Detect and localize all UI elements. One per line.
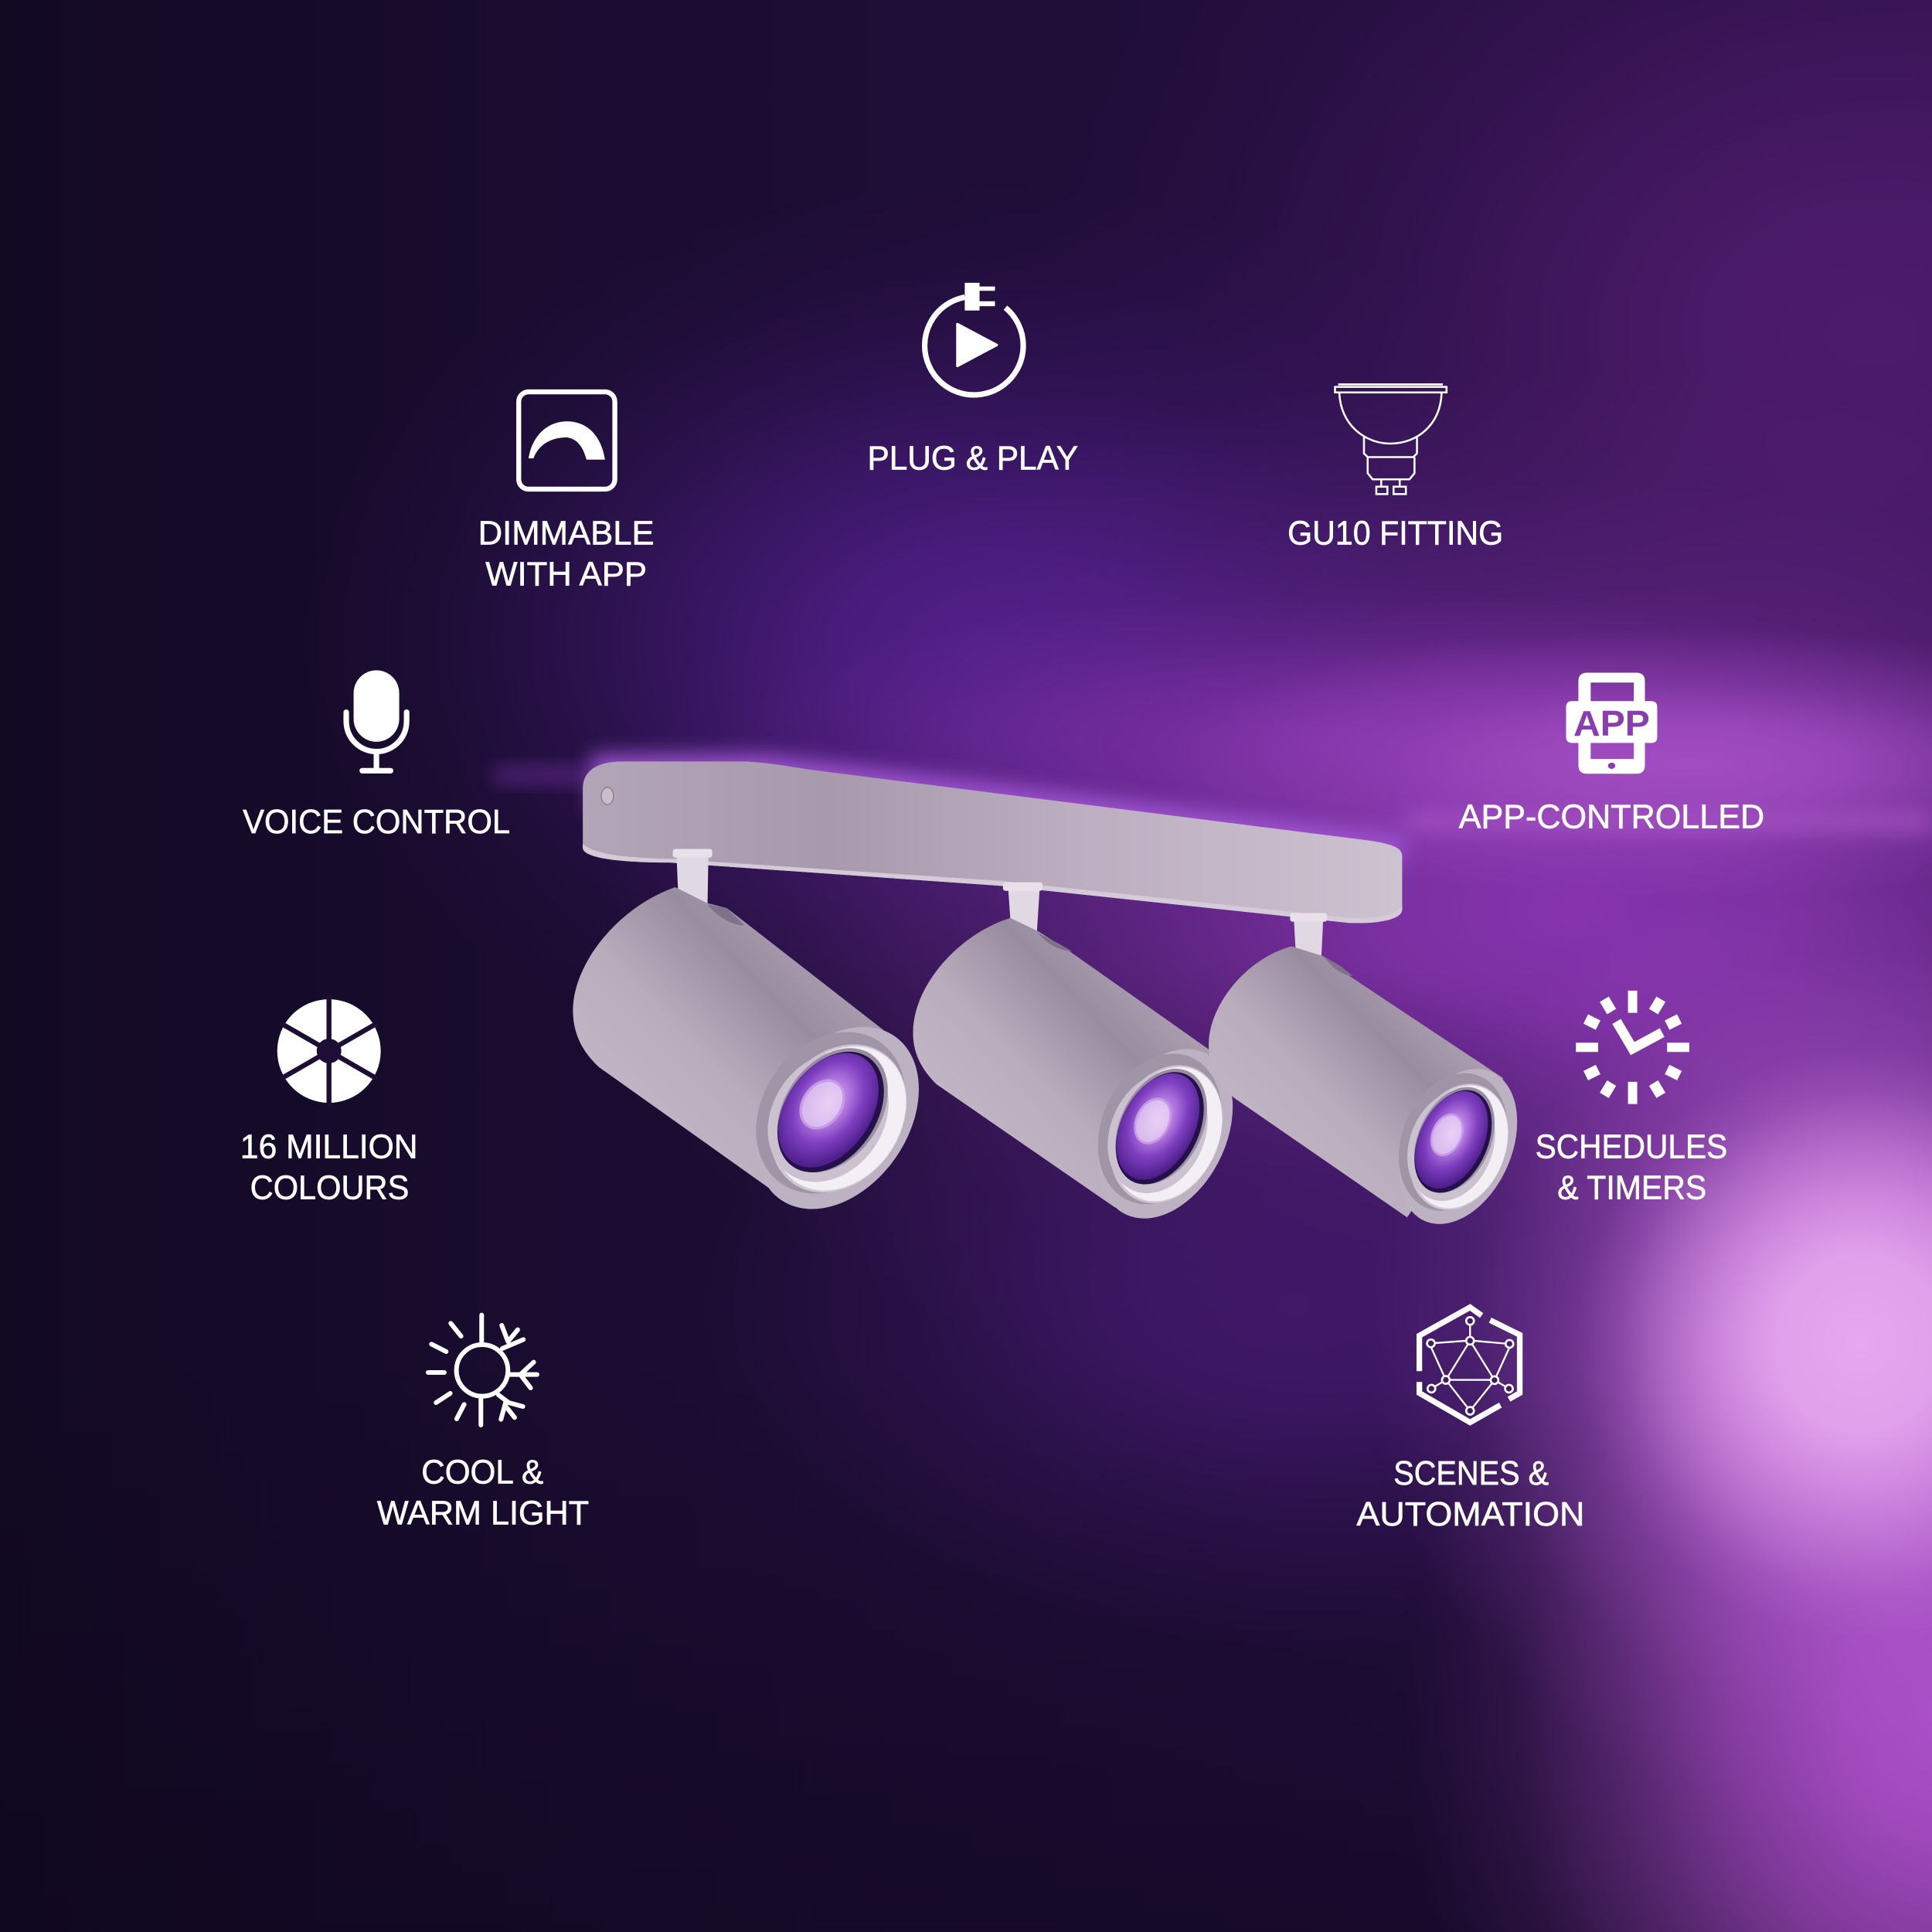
spotlight 3 [1209,913,1542,1250]
feature: app controlled [1459,673,1764,835]
feature: plug and play [867,283,1078,477]
feature: dimmable with app: WITH APP [485,555,647,593]
feature: schedules and timers [1536,991,1727,1206]
icon: hexagon network [1420,1308,1520,1423]
feature: scenes and automation [1356,1308,1584,1533]
label: DIMMABLE [478,515,655,553]
icon: plug timer [925,283,1023,395]
label: APP-CONTROLLED [1459,798,1764,835]
label: COOL & [421,1454,543,1492]
feature: schedules and timers: & TIMERS [1557,1168,1706,1206]
feature: cool and warm light: WARM LIGHT [377,1494,589,1532]
icon: microphone [346,670,406,770]
spotlight 2 [913,883,1260,1247]
label: VOICE CONTROL [243,803,510,841]
feature: 16 million colours [240,995,417,1206]
ceiling bar [583,761,1402,923]
label: SCHEDULES [1536,1128,1727,1166]
label: SCENES & [1393,1454,1549,1492]
icon: tablet with APP badge [1566,673,1657,774]
label: 16 MILLION [240,1128,417,1166]
feature: scenes and automation: AUTOMATION [1356,1495,1584,1533]
label: PLUG & PLAY [867,439,1078,477]
product: triple spotlight fixture [573,761,1542,1250]
icon: clock [1576,991,1689,1104]
icon: tablet with APP badge: APP [1573,703,1650,743]
icon: sun and snowflake [428,1315,537,1425]
icon: colour wheel [277,995,381,1107]
icon: GU10 bulb [1335,384,1447,494]
icon: dimmer [519,392,615,489]
spotlight 1 [573,849,952,1240]
feature: cool and warm light [377,1315,589,1532]
feature: dimmable with app [478,392,655,593]
label: GU10 FITTING [1287,515,1503,553]
feature: GU10 fitting [1287,384,1503,553]
feature: 16 million colours: COLOURS [250,1168,409,1206]
feature: voice control [243,670,510,841]
